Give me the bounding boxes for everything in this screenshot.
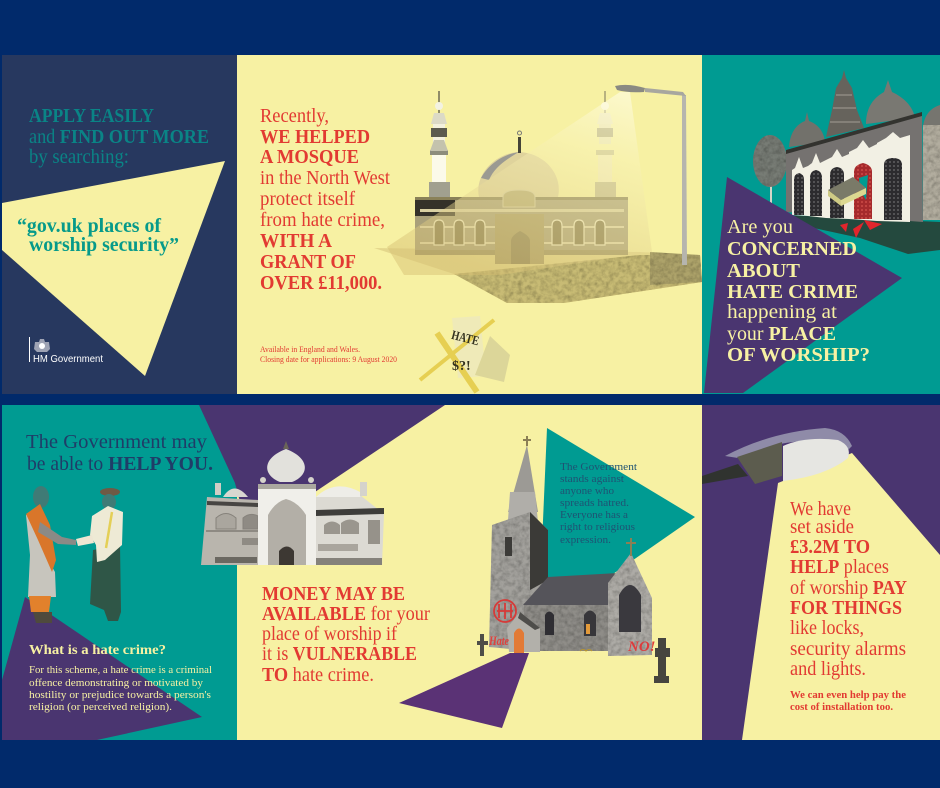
installation note bbox=[790, 690, 906, 713]
heading: apply easily: by searching: bbox=[29, 147, 129, 168]
left wing bbox=[201, 497, 258, 565]
funding text: set aside bbox=[790, 517, 854, 538]
icon: brick bbox=[828, 177, 866, 206]
logo: HM Government: HM Government bbox=[33, 353, 103, 365]
icon: temple bbox=[785, 70, 940, 254]
ground bbox=[785, 215, 940, 254]
domes bbox=[789, 112, 825, 147]
funding text bbox=[790, 499, 907, 680]
installation note: cost of installation too. bbox=[790, 702, 893, 713]
question text bbox=[727, 216, 870, 366]
availability note bbox=[260, 344, 397, 364]
figure: hat and jacket bbox=[76, 488, 123, 621]
main text: OVER £11,000. bbox=[260, 272, 382, 294]
definition text bbox=[29, 664, 212, 713]
definition text: religion (or perceived religion). bbox=[29, 701, 172, 713]
centre tower bbox=[826, 70, 864, 137]
right wing bbox=[316, 495, 384, 565]
ground bbox=[374, 248, 702, 303]
light beam bbox=[742, 453, 940, 740]
funding text: security alarms bbox=[790, 639, 906, 660]
logo: HM Government bbox=[29, 337, 103, 365]
panel: apply bbox=[2, 55, 237, 394]
nave bbox=[524, 603, 614, 651]
heading: apply easily: and FIND OUT MORE bbox=[29, 127, 209, 148]
heading: apply easily: APPLY EASILY bbox=[29, 106, 154, 127]
definition text: offence demonstrating or motivated by bbox=[29, 677, 203, 689]
statement text: right to religious bbox=[560, 522, 635, 533]
availability note: Closing date for applications: 9 August 2020 bbox=[260, 354, 397, 364]
icon: church: NO! bbox=[627, 639, 656, 655]
search phrase bbox=[17, 216, 179, 256]
main text: GRANT OF bbox=[260, 251, 356, 273]
panel: yellow centre bottom bbox=[237, 405, 702, 740]
body text: money may be available: TO hate crime. bbox=[262, 665, 374, 686]
centre bay bbox=[258, 484, 316, 565]
figure: orange robe bbox=[26, 486, 76, 623]
panel: hate crime question bbox=[702, 55, 940, 394]
icon: domed temple bbox=[201, 441, 384, 565]
definition text: hostility or prejudice towards a person's bbox=[29, 689, 211, 701]
wall bbox=[786, 113, 923, 222]
gable bbox=[608, 553, 652, 656]
vandalised window bbox=[854, 163, 872, 219]
icon: street lamp bbox=[702, 428, 852, 484]
main text: WE HELPED bbox=[260, 126, 370, 148]
question text: HATE CRIME bbox=[727, 281, 858, 303]
tower bbox=[489, 512, 548, 650]
body text: money may be available bbox=[262, 584, 430, 686]
main hall bbox=[415, 197, 628, 255]
icon: street lamp bbox=[615, 85, 687, 265]
icon: crossed hate note and envelope bbox=[420, 316, 510, 392]
glass shards bbox=[840, 220, 882, 238]
light beam bbox=[387, 92, 652, 275]
yellow callout triangle bbox=[2, 161, 225, 376]
graffiti bbox=[494, 600, 516, 622]
question text: Are you bbox=[727, 216, 793, 238]
funding text: HELP places bbox=[790, 557, 889, 578]
heading: help you: be able to HELP YOU. bbox=[27, 453, 213, 475]
question text: ABOUT bbox=[727, 260, 801, 282]
right minaret bbox=[595, 91, 616, 197]
centre dome bbox=[267, 449, 305, 482]
statement text: The Government bbox=[560, 462, 637, 473]
funding text: of worship PAY bbox=[790, 578, 907, 599]
statement text: stands against bbox=[560, 474, 624, 485]
statement text: Everyone has a bbox=[560, 510, 628, 521]
statement text: spreads hatred. bbox=[560, 498, 629, 509]
right brick wing bbox=[923, 125, 940, 220]
main text bbox=[260, 105, 390, 294]
heading: help you: The Government may bbox=[26, 431, 207, 453]
panel: mosque case study bbox=[237, 55, 702, 394]
funding text: We have bbox=[790, 499, 851, 520]
main text: WITH A bbox=[260, 230, 333, 252]
heading: help you bbox=[26, 431, 213, 475]
main text: from hate crime, bbox=[260, 209, 385, 231]
left minaret bbox=[429, 91, 450, 197]
panel: funding bbox=[702, 405, 940, 740]
statement text bbox=[560, 462, 637, 546]
icon: small grave cross bbox=[477, 634, 488, 656]
main text: protect itself bbox=[260, 188, 355, 210]
panel: help you bbox=[2, 405, 237, 740]
funding text: and lights. bbox=[790, 659, 866, 680]
statement text: expression. bbox=[560, 535, 611, 546]
main text: Recently, bbox=[260, 105, 329, 127]
icon: mosque bbox=[415, 91, 628, 264]
windows bbox=[794, 158, 902, 220]
heading: apply easily bbox=[29, 106, 209, 168]
icon: tree bbox=[753, 135, 787, 204]
icon: crossed hate note and envelope: HATE bbox=[450, 327, 481, 348]
porch bbox=[507, 612, 540, 652]
main text: in the North West bbox=[260, 167, 390, 189]
availability note: Available in England and Wales. bbox=[260, 344, 360, 354]
icon: church: Hate bbox=[488, 633, 509, 648]
question text: your PLACE bbox=[727, 323, 836, 345]
definition text: For this scheme, a hate crime is a criminal bbox=[29, 664, 212, 676]
icon: church bbox=[488, 436, 656, 656]
body text: money may be available: place of worship if bbox=[262, 624, 397, 645]
icon: large grave cross bbox=[654, 638, 670, 683]
purple triangle bbox=[704, 177, 902, 393]
funding text: like locks, bbox=[790, 618, 864, 639]
spire bbox=[508, 445, 538, 512]
arches bbox=[792, 132, 910, 222]
windows bbox=[434, 220, 605, 245]
body text: money may be available: AVAILABLE for your bbox=[262, 604, 430, 625]
purple path bbox=[399, 653, 529, 728]
funding text: £3.2M TO bbox=[790, 537, 870, 558]
body text: money may be available: MONEY MAY BE bbox=[262, 584, 405, 605]
heading: what is a hate crime: What is a hate crime? bbox=[29, 643, 166, 658]
dome bbox=[478, 152, 559, 197]
statement text: anyone who bbox=[560, 486, 614, 497]
body text: money may be available: it is VULNERABLE bbox=[262, 644, 417, 665]
question text: CONCERNED bbox=[727, 238, 857, 260]
main text: A MOSQUE bbox=[260, 146, 359, 168]
teal triangle bbox=[540, 428, 695, 590]
installation note: We can even help pay the bbox=[790, 690, 906, 701]
question text: OF WORSHIP? bbox=[727, 344, 870, 366]
question text: happening at bbox=[727, 301, 837, 323]
search phrase: “gov.uk places of bbox=[17, 216, 162, 237]
icon: crossed hate note and envelope: $?! bbox=[452, 359, 471, 374]
funding text: FOR THINGS bbox=[790, 598, 902, 619]
central bay bbox=[495, 214, 544, 264]
search phrase: worship security” bbox=[29, 235, 179, 256]
purple triangle bbox=[2, 597, 202, 740]
purple wedge bbox=[199, 405, 445, 502]
